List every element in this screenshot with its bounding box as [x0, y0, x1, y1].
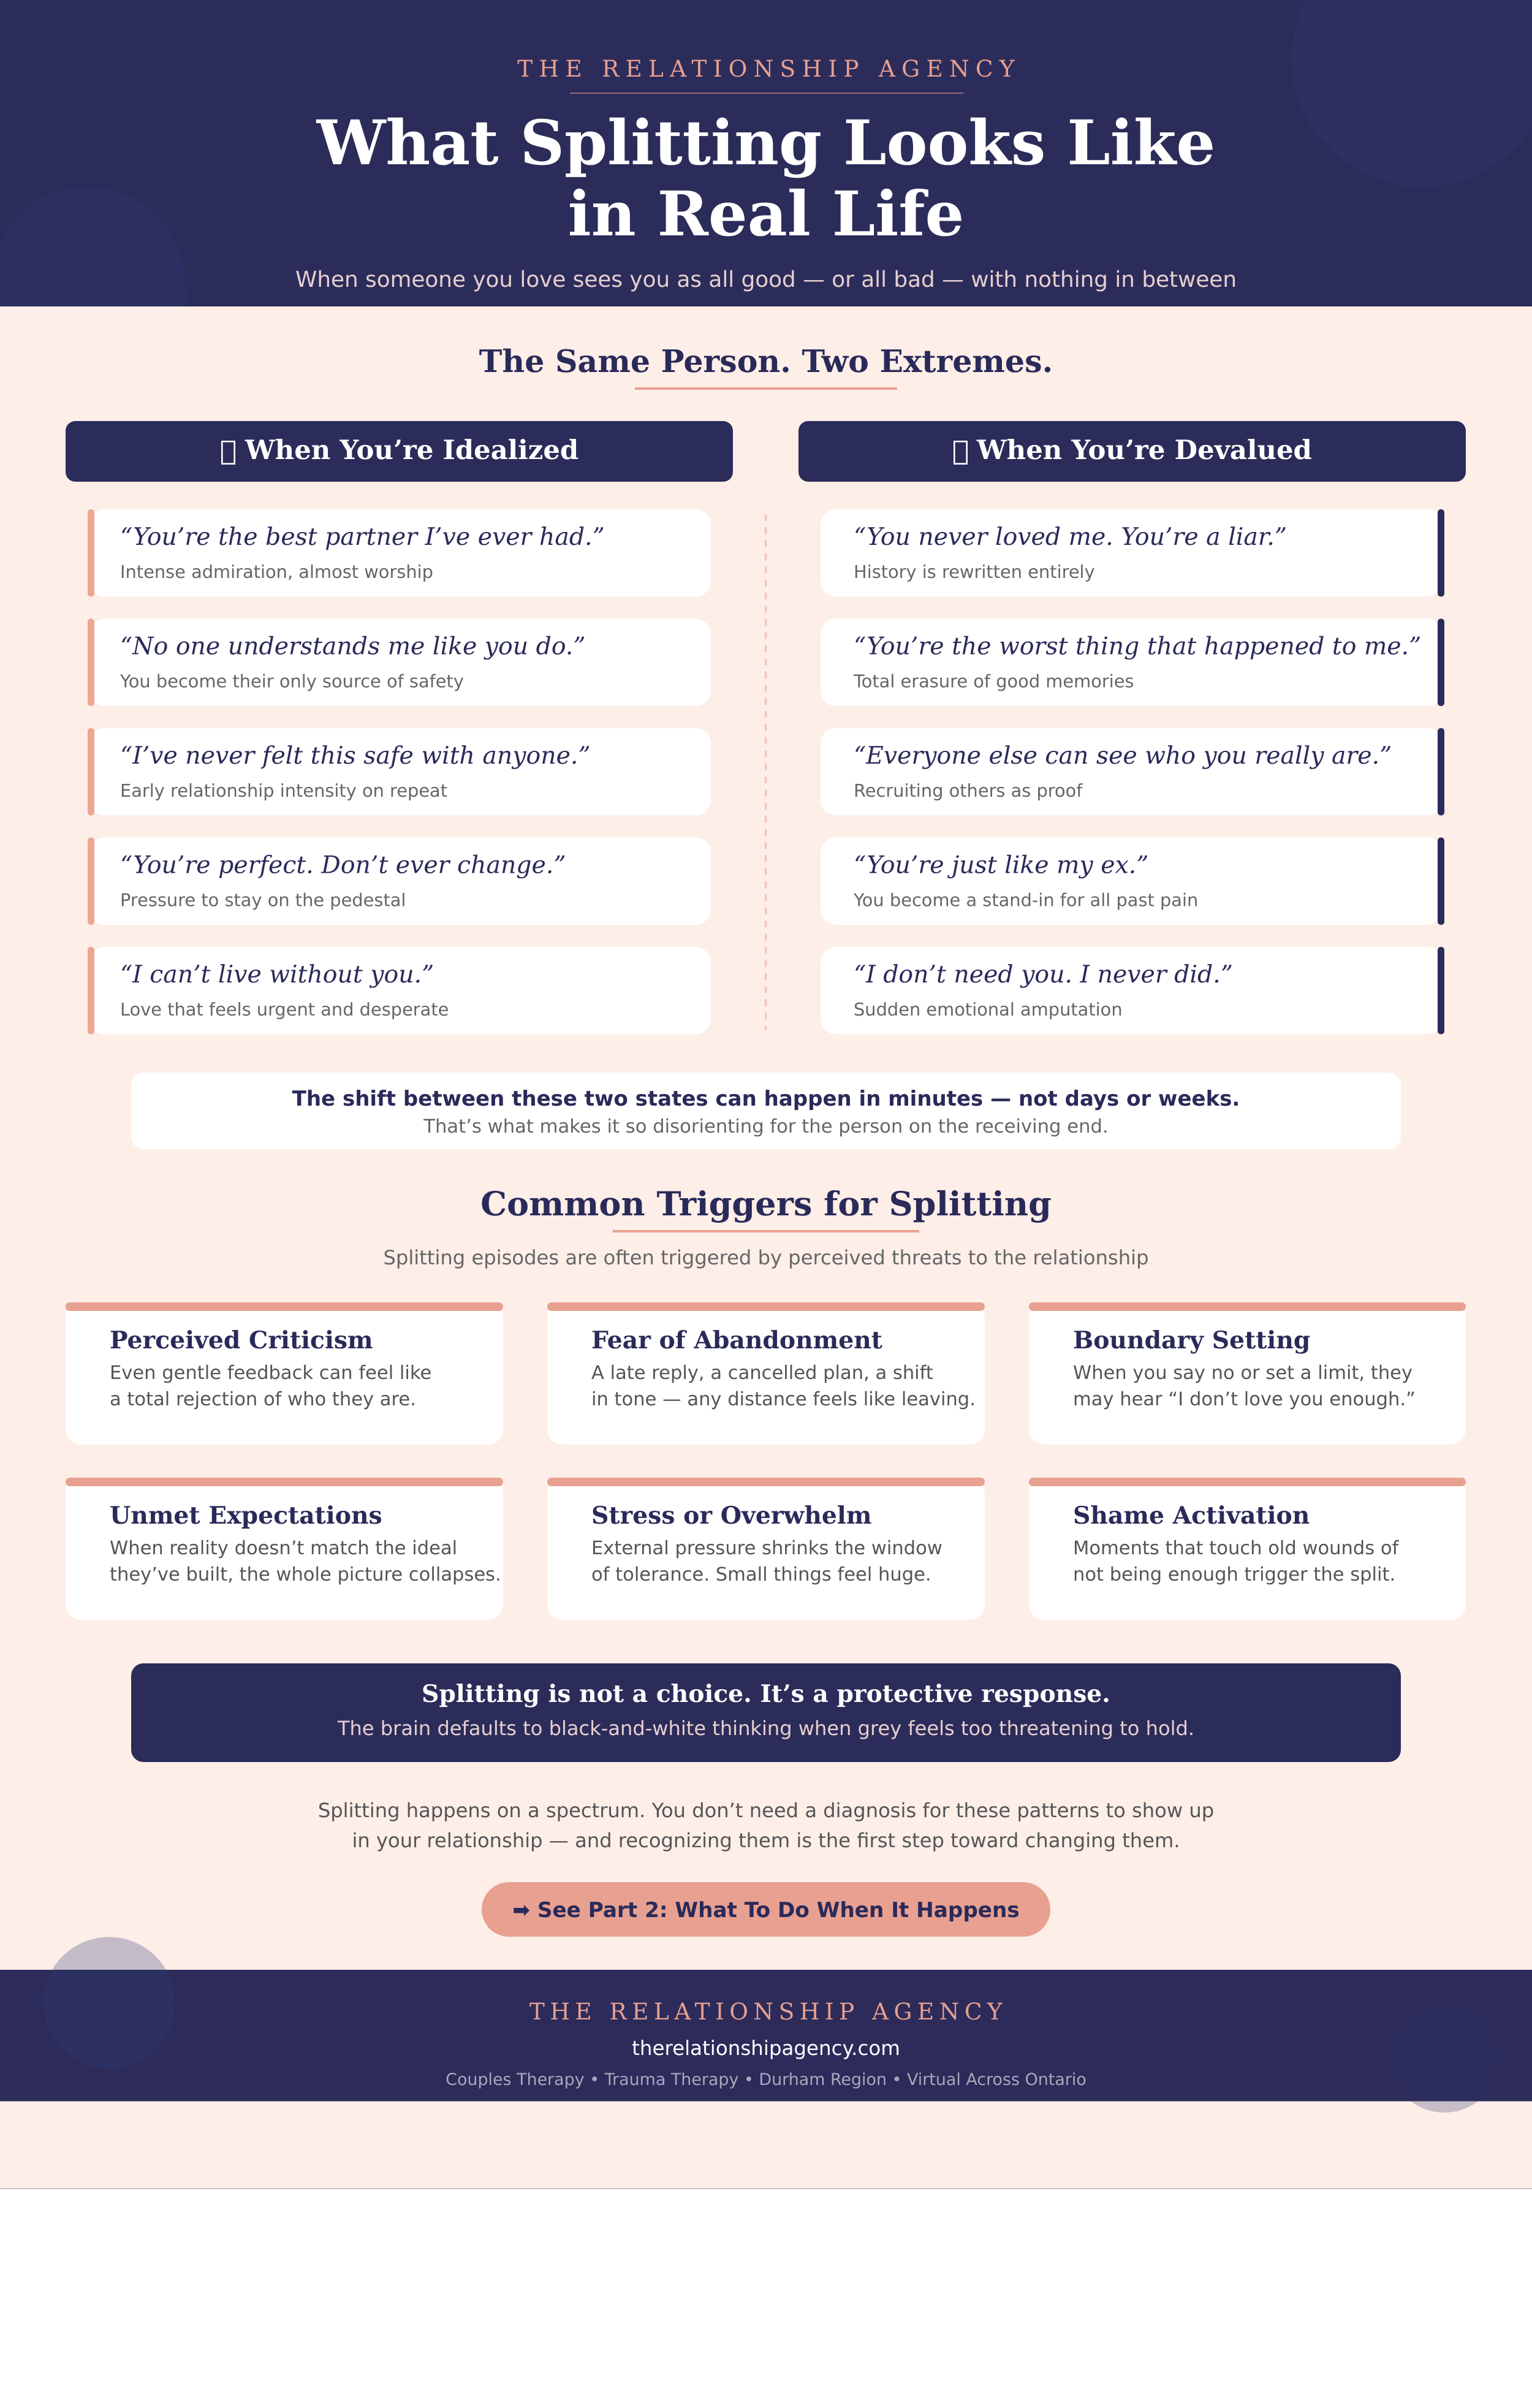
trigger card: unmet expectations: When reality doesn’t match the ideal: [110, 1538, 457, 1559]
trigger card: perceived criticism: Even gentle feedback can feel like: [110, 1362, 431, 1384]
trigger card: shame activation: Moments that touch old wounds of: [1073, 1538, 1400, 1559]
trigger card: unmet expectations: they’ve built, the whole picture collapses.: [110, 1564, 501, 1586]
trigger card: unmet expectations: [66, 1478, 503, 1620]
trigger card: stress or overwhelm: [547, 1478, 985, 1620]
closing paragraph: in your relationship — and recognizing them is the first step toward changing them.: [352, 1829, 1180, 1852]
header circle: bottom left: [0, 187, 186, 306]
main title second line: in Real Life: [568, 178, 964, 250]
quote card 5: “I don’t need you. I never did.”: [854, 960, 1233, 989]
quote card 3: [821, 728, 1444, 815]
panel: triggers grid: [66, 1302, 1466, 1620]
quote card 2: You become their only source of safety: [119, 670, 464, 691]
quote card 5: [821, 947, 1444, 1035]
trigger card: shame activation: not being enough trigger the split.: [1073, 1564, 1395, 1586]
trigger card: shame activation: [1029, 1478, 1466, 1620]
trigger card: stress or overwhelm: Stress or Overwhelm: [591, 1502, 871, 1530]
call to action button: [482, 1882, 1050, 1937]
quote card 5: Love that feels urgent and desperate: [120, 999, 449, 1020]
trigger card: perceived criticism: [66, 1302, 503, 1445]
quote card 4: “You’re just like my ex.”: [854, 851, 1148, 879]
closing paragraph: [318, 1799, 1214, 1852]
quote card 2: [821, 619, 1444, 706]
subtitle: When someone you love sees you as all good — or all bad — with nothing in between: [295, 267, 1237, 292]
header circle: top right: [1292, 0, 1532, 187]
callout: protective response: Splitting is not a choice. It’s a protective response.: [422, 1680, 1110, 1708]
trigger card: shame activation: Shame Activation: [1073, 1502, 1310, 1530]
quote card 3: [88, 728, 711, 815]
brand underline: [570, 93, 963, 94]
callout: shift between states: The shift between these two states can happen in minutes — not days or weeks.: [292, 1087, 1240, 1111]
quote card 3: Recruiting others as proof: [854, 780, 1083, 801]
footer circle: right: [1389, 2002, 1500, 2113]
column header: idealized: When You’re Idealized: [245, 435, 578, 466]
callout: protective response: [131, 1663, 1401, 1762]
trigger card: fear of abandonment: A late reply, a cancelled plan, a shift: [591, 1362, 933, 1384]
quote card 4: “You’re perfect. Don’t ever change.”: [120, 851, 566, 879]
callout: shift between states: That’s what makes it so disorienting for the person on the receiving end.: [423, 1116, 1109, 1138]
panel: devalued quotes: [821, 509, 1444, 1035]
quote card 5: [88, 947, 711, 1035]
trigger card: boundary setting: Boundary Setting: [1073, 1326, 1310, 1354]
footer circle: left: [43, 1937, 175, 2069]
quote card 4: [88, 837, 711, 925]
quote card 1: [821, 509, 1444, 597]
header band: [0, 0, 1532, 306]
section heading: triggers: [383, 1184, 1149, 1269]
column header: devalued: When You’re Devalued: [976, 435, 1312, 466]
trigger card: fear of abandonment: Fear of Abandonment: [591, 1326, 882, 1354]
main title: What Splitting Looks Like: [316, 107, 1215, 179]
quote card 1: History is rewritten entirely: [854, 561, 1095, 582]
quote card 5: “I can’t live without you.”: [120, 960, 434, 989]
quote card 5: Sudden emotional amputation: [854, 999, 1123, 1020]
quote card 1: Intense admiration, almost worship: [120, 561, 433, 582]
quote card 2: “You’re the worst thing that happened to me.”: [854, 632, 1421, 661]
callout: shift between states: [131, 1073, 1401, 1149]
callout: protective response: The brain defaults to black-and-white thinking when grey feels too threatening to hold.: [337, 1717, 1194, 1740]
section heading: two extremes: The Same Person. Two Extremes.: [479, 343, 1053, 379]
quote card 3: “I’ve never felt this safe with anyone.”: [120, 742, 591, 770]
icon: missing glyph box: [954, 441, 967, 464]
footer services: Couples Therapy • Trauma Therapy • Durham Region • Virtual Across Ontario: [446, 2070, 1086, 2089]
quote card 2: [88, 619, 711, 706]
footer band: [0, 1970, 1532, 2101]
section intro: Splitting episodes are often triggered by perceived threats to the relationship: [383, 1246, 1149, 1269]
trigger card: perceived criticism: a total rejection of who they are.: [110, 1389, 416, 1410]
trigger card: unmet expectations: Unmet Expectations: [110, 1502, 382, 1530]
footer website: therelationshipagency.com: [632, 2037, 900, 2060]
trigger card: boundary setting: [1029, 1302, 1466, 1445]
trigger card: fear of abandonment: [547, 1302, 985, 1445]
quote card 3: “Everyone else can see who you really are.”: [854, 742, 1392, 770]
trigger card: stress or overwhelm: External pressure shrinks the window: [591, 1538, 942, 1559]
call to action button: ➡ See Part 2: What To Do When It Happens: [512, 1898, 1020, 1923]
quote card 2: Total erasure of good memories: [853, 670, 1134, 691]
quote card 1: [88, 509, 711, 597]
column header: devalued: [798, 421, 1466, 482]
quote card 1: “You never loved me. You’re a liar.”: [854, 523, 1287, 551]
icon: missing glyph box: [222, 441, 235, 464]
trigger card: boundary setting: may hear “I don’t love you enough.”: [1073, 1389, 1416, 1410]
quote card 3: Early relationship intensity on repeat: [120, 780, 447, 801]
trigger card: boundary setting: When you say no or set a limit, they: [1073, 1362, 1413, 1384]
panel: idealized quotes: [88, 509, 711, 1035]
trigger card: perceived criticism: Perceived Criticism: [110, 1326, 373, 1354]
quote card 4: Pressure to stay on the pedestal: [120, 890, 406, 911]
trigger card: stress or overwhelm: of tolerance. Small things feel huge.: [591, 1564, 931, 1586]
section heading: triggers: Common Triggers for Splitting: [480, 1184, 1052, 1223]
quote card 4: [821, 837, 1444, 925]
column header: idealized: [66, 421, 733, 482]
closing paragraph: Splitting happens on a spectrum. You don’t need a diagnosis for these patterns to show up: [318, 1799, 1214, 1822]
brand name: THE RELATIONSHIP AGENCY: [517, 55, 1021, 82]
quote card 4: You become a stand-in for all past pain: [853, 890, 1198, 911]
dashed centre divider: [765, 514, 767, 1030]
quote card 1: “You’re the best partner I’ve ever had.”: [120, 523, 605, 551]
quote card 2: “No one understands me like you do.”: [120, 632, 586, 661]
footer brand: THE RELATIONSHIP AGENCY: [529, 1998, 1007, 2025]
trigger card: fear of abandonment: in tone — any distance feels like leaving.: [591, 1389, 976, 1410]
